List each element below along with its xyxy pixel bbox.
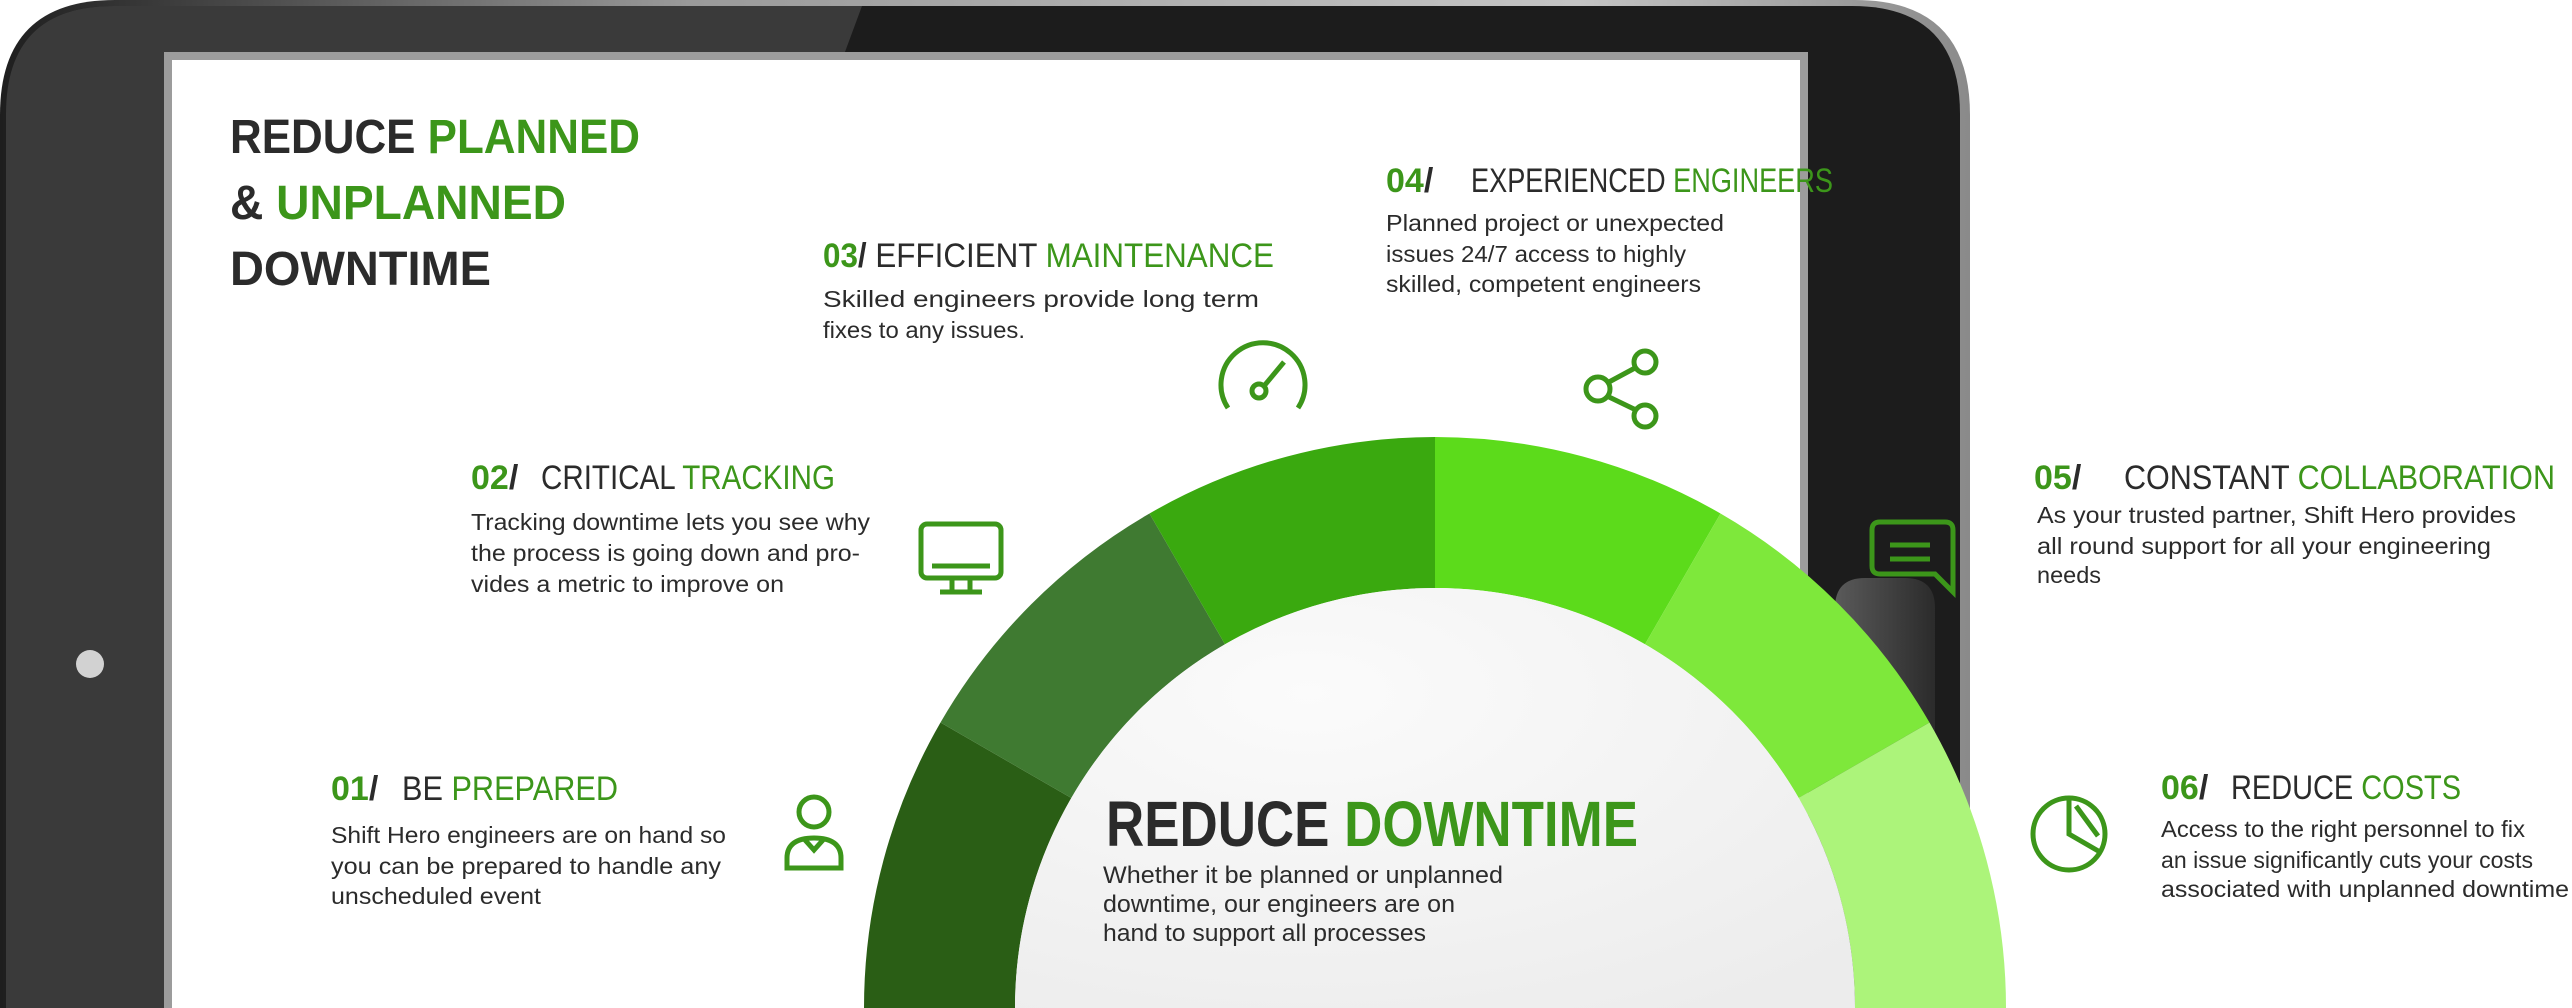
item 02: critical tracking: vides a metric to improve on bbox=[471, 571, 784, 597]
title: REDUCE PLANNED bbox=[230, 111, 640, 164]
side button bbox=[1835, 578, 1935, 1008]
icon: gauge bbox=[1221, 343, 1305, 408]
item 06: reduce costs: REDUCE COSTS bbox=[2231, 769, 2461, 807]
item 04: experienced engineers bbox=[1386, 162, 1833, 297]
center text bbox=[1103, 788, 1638, 947]
ring chart bbox=[864, 437, 2006, 1008]
center text: hand to support all processes bbox=[1103, 920, 1426, 947]
item 05: constant collaboration: all round support for all your engineering bbox=[2037, 533, 2491, 559]
item 04: experienced engineers: skilled, competent engineers bbox=[1386, 271, 1701, 297]
item 02: critical tracking: the process is going down and pro- bbox=[471, 540, 860, 566]
item 02: critical tracking: CRITICAL TRACKING bbox=[541, 459, 835, 497]
item 01: be prepared: Shift Hero engineers are on hand so bbox=[331, 822, 726, 848]
center text: REDUCE DOWNTIME bbox=[1106, 788, 1638, 860]
item 01: be prepared: unscheduled event bbox=[331, 883, 542, 909]
item 03: efficient maintenance: Skilled engineers provide long term bbox=[823, 286, 1259, 312]
center text: downtime, our engineers are on bbox=[1103, 891, 1455, 918]
item 03: efficient maintenance bbox=[823, 237, 1274, 343]
item 01: be prepared: you can be prepared to handle any bbox=[331, 853, 722, 879]
item 06: reduce costs: Access to the right personnel to fix bbox=[2161, 816, 2526, 842]
item 06: reduce costs bbox=[2161, 769, 2569, 902]
tablet frame bbox=[0, 0, 1970, 1008]
icon: pie chart bbox=[2033, 798, 2105, 870]
item 03: efficient maintenance: fixes to any issues. bbox=[823, 317, 1025, 343]
item 02: critical tracking bbox=[471, 459, 871, 597]
screen bbox=[164, 52, 1808, 1008]
item 05: constant collaboration: needs bbox=[2037, 562, 2101, 588]
item 01: be prepared: BE PREPARED bbox=[402, 770, 618, 808]
icon: monitor bbox=[921, 524, 1001, 592]
title: DOWNTIME bbox=[230, 243, 491, 296]
item 01: be prepared bbox=[331, 770, 726, 909]
item 06: reduce costs: associated with unplanned downtime bbox=[2161, 876, 2569, 902]
icon: chat bbox=[1872, 522, 1953, 592]
item 03: efficient maintenance: 03/ EFFICIENT MAINTENANCE bbox=[823, 237, 1274, 275]
item 04: experienced engineers: 04/ bbox=[1386, 162, 1434, 200]
item 02: critical tracking: Tracking downtime lets you see why bbox=[471, 509, 871, 535]
item 05: constant collaboration: CONSTANT COLLABORATION bbox=[2124, 459, 2555, 497]
item 05: constant collaboration: As your trusted partner, Shift Hero provides bbox=[2037, 502, 2516, 528]
title: & UNPLANNED bbox=[230, 177, 566, 230]
title bbox=[230, 111, 640, 296]
home button bbox=[76, 650, 104, 678]
item 06: reduce costs: 06/ bbox=[2161, 769, 2209, 807]
center text: Whether it be planned or unplanned bbox=[1103, 862, 1503, 889]
item 06: reduce costs: an issue significantly cuts your costs bbox=[2161, 847, 2533, 873]
item 05: constant collaboration: 05/ bbox=[2034, 459, 2082, 497]
item 04: experienced engineers: Planned project or unexpected bbox=[1386, 210, 1724, 236]
item 05: constant collaboration bbox=[2034, 459, 2555, 588]
item 02: critical tracking: 02/ bbox=[471, 459, 519, 497]
item 01: be prepared: 01/ bbox=[331, 770, 379, 808]
item 04: experienced engineers: EXPERIENCED ENGINEERS bbox=[1471, 162, 1833, 200]
icon: share bbox=[1586, 351, 1656, 427]
item 04: experienced engineers: issues 24/7 access to highly bbox=[1386, 241, 1687, 267]
icon: person bbox=[787, 797, 841, 868]
